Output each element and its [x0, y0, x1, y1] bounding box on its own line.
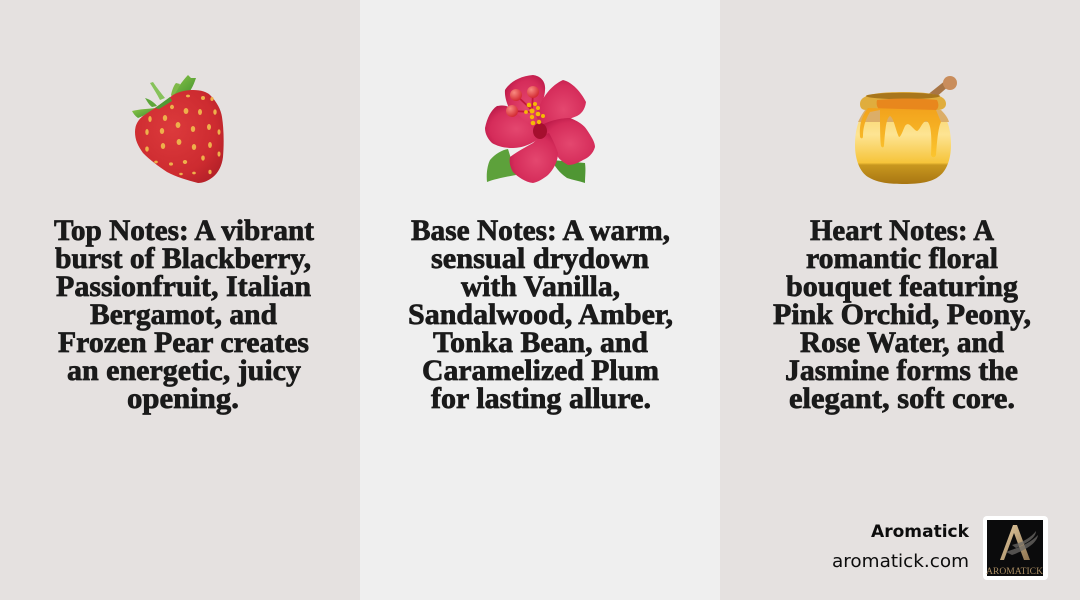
text block: top notes: opening.	[127, 382, 239, 415]
text block: base notes: with Vanilla,	[461, 270, 620, 303]
panel: base notes	[360, 0, 720, 600]
text block: base notes: sensual drydown	[431, 242, 649, 275]
text block: base notes: Caramelized Plum	[422, 354, 659, 387]
text block: base notes	[408, 214, 673, 415]
text block: top notes: Passionfruit, Italian	[56, 270, 311, 303]
text block: heart notes: elegant, soft core.	[789, 382, 1015, 415]
panel: heart notes	[720, 0, 1080, 600]
text block: base notes: for lasting allure.	[431, 382, 651, 415]
icon: strawberry	[132, 75, 224, 183]
text block: heart notes: Pink Orchid, Peony,	[773, 298, 1031, 331]
text block: top notes: Bergamot, and	[90, 298, 277, 331]
text block: top notes: Top Notes: A vibrant	[54, 214, 314, 247]
icon: honey pot	[855, 76, 957, 184]
text block: heart notes: bouquet featuring	[786, 270, 1018, 303]
text block: base notes: Sandalwood, Amber,	[408, 298, 673, 331]
text block: top notes: an energetic, juicy	[67, 354, 301, 387]
logo	[983, 516, 1048, 580]
text block: top notes	[54, 214, 314, 415]
panel: top notes	[0, 0, 360, 600]
text block: top notes: Frozen Pear creates	[58, 326, 309, 359]
logo: AROMATICK	[986, 566, 1044, 576]
text block: heart notes	[773, 214, 1031, 415]
text block: heart notes: Jasmine forms the	[785, 354, 1018, 387]
text block: heart notes: Heart Notes: A	[810, 214, 994, 247]
text block: top notes: burst of Blackberry,	[55, 242, 311, 275]
text block: base notes: Base Notes: A warm,	[411, 214, 670, 247]
brand url: aromatick.com	[832, 551, 969, 572]
icon: hibiscus flower	[485, 75, 595, 183]
brand name: Aromatick	[871, 522, 970, 542]
text block: heart notes: romantic floral	[806, 242, 998, 275]
text block: base notes: Tonka Bean, and	[433, 326, 648, 359]
text block: heart notes: Rose Water, and	[800, 326, 1004, 359]
